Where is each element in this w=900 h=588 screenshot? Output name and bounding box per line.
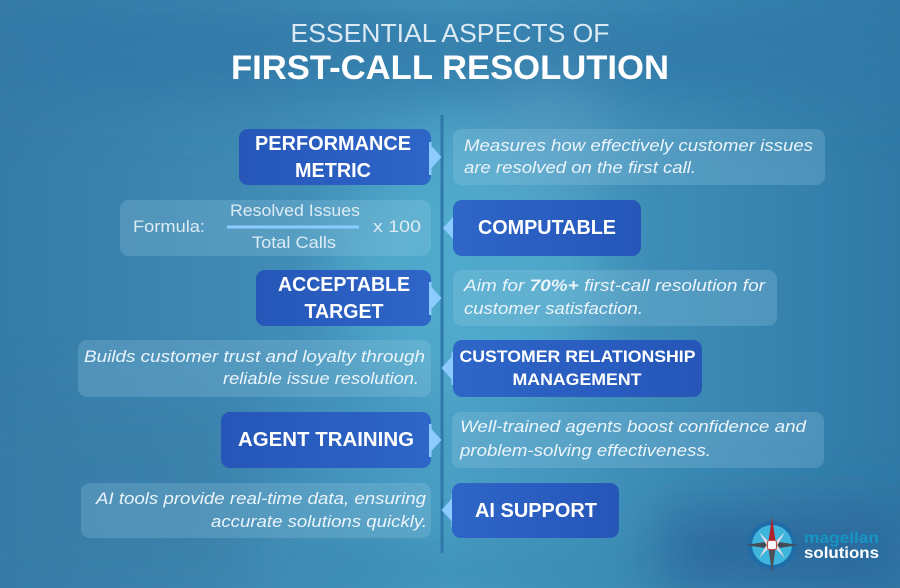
logo wordmark: solutions: solutions (804, 545, 879, 562)
title (231, 18, 669, 87)
arrow: right (429, 282, 442, 315)
label: acceptable target: TARGET (304, 301, 384, 323)
description: acceptable target: Aim for 70%+ first-call resolution for (463, 276, 766, 295)
description: agent training: problem-solving effectiveness. (459, 441, 711, 460)
title line 1: ESSENTIAL ASPECTS OF (290, 18, 610, 48)
title line 2: FIRST-CALL RESOLUTION (231, 49, 669, 87)
description: acceptable target (453, 270, 777, 326)
formula panel: x 100 (373, 217, 421, 236)
label: customer relationship management (453, 340, 702, 397)
label: customer relationship management: CUSTOMER RELATIONSHIP (460, 347, 696, 366)
description: agent training: Well-trained agents boost confidence and (460, 417, 807, 436)
label: agent training (221, 412, 431, 468)
label: customer relationship management: MANAGEMENT (512, 370, 642, 389)
row 5: agent training (221, 412, 824, 468)
label: performance metric: METRIC (295, 160, 371, 182)
description: acceptable target: customer satisfaction. (464, 299, 643, 318)
label: ai support (452, 483, 619, 538)
logo: magellan solutions (745, 517, 879, 573)
label: performance metric (239, 129, 431, 185)
arrow: right (429, 424, 442, 457)
row 4: customer relationship management (78, 340, 702, 397)
row 2: computable (120, 200, 641, 256)
label: performance metric: PERFORMANCE (255, 133, 411, 155)
description: ai support: accurate solutions quickly. (211, 512, 427, 531)
description: customer relationship: Builds customer trust and loyalty through (84, 347, 425, 366)
description: ai support (81, 483, 431, 538)
description: customer relationship (78, 340, 431, 397)
description: performance metric (453, 129, 825, 185)
arrow: left (442, 352, 454, 385)
formula panel (120, 200, 431, 256)
label: acceptable target (256, 270, 431, 326)
description: customer relationship: reliable issue resolution. (223, 369, 419, 388)
row 6: ai support (81, 483, 619, 538)
label: computable (453, 200, 641, 256)
arrow: left (443, 213, 456, 246)
description: performance metric: Measures how effectively customer issues (464, 136, 814, 155)
description: agent training (452, 412, 824, 468)
formula panel: Formula: (133, 217, 205, 236)
description: performance metric: are resolved on the first call. (464, 158, 696, 177)
label: acceptable target: ACCEPTABLE (278, 274, 410, 296)
description: ai support: AI tools provide real-time data, ensuring (95, 489, 427, 508)
formula panel: Resolved Issues (230, 201, 360, 220)
formula panel: Total Calls (252, 233, 336, 252)
label: computable: COMPUTABLE (478, 217, 616, 239)
logo wordmark: magellan: magellan (804, 530, 879, 547)
row 1: performance metric (239, 129, 825, 185)
row 3: acceptable target (256, 270, 777, 326)
arrow: left (442, 494, 454, 527)
central timeline (440, 115, 444, 553)
arrow: right (429, 142, 442, 175)
icon: compass (745, 517, 799, 573)
label: ai support: AI SUPPORT (475, 500, 597, 522)
label: agent training: AGENT TRAINING (238, 429, 414, 451)
